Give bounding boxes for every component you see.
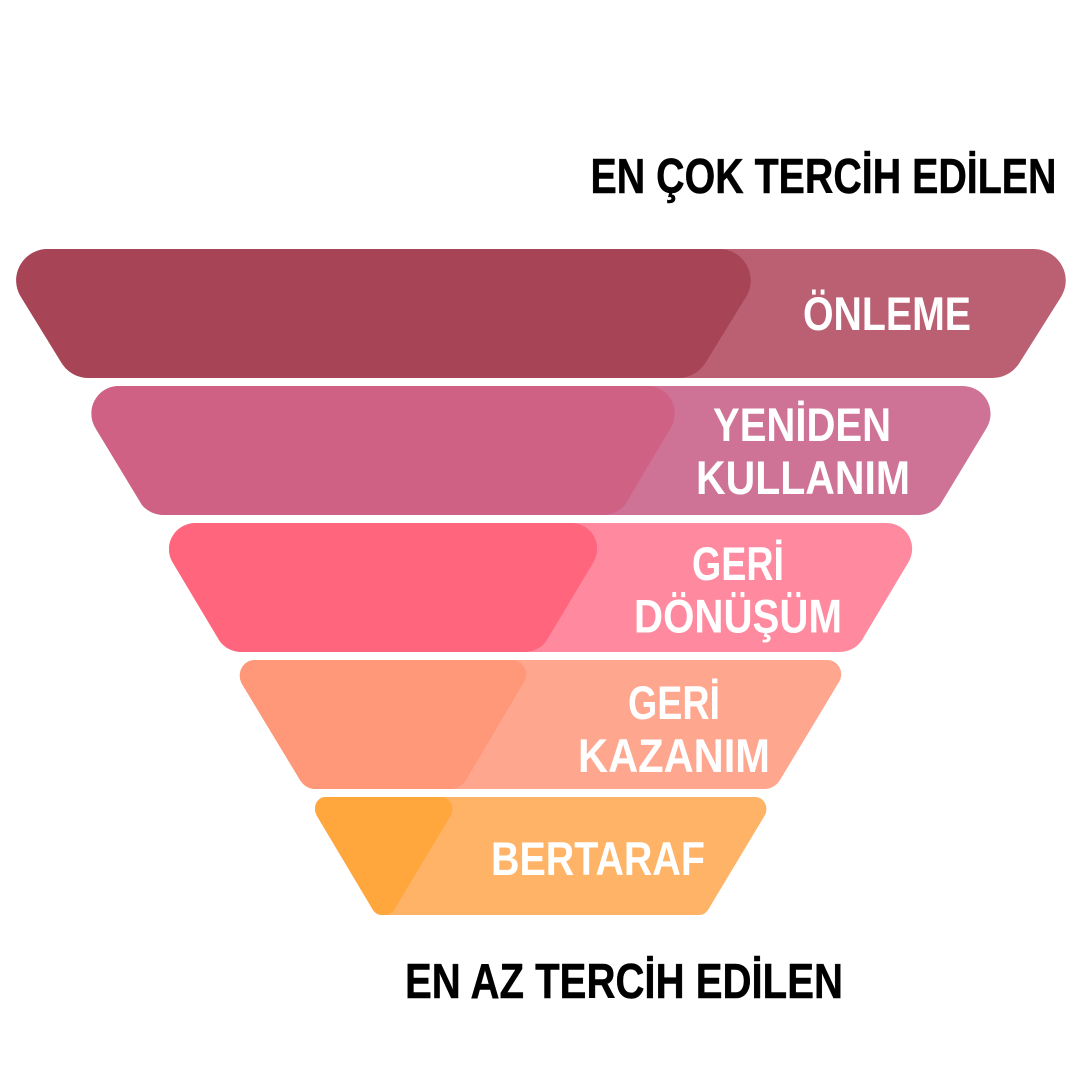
label line: Geri: GERİ (692, 537, 784, 590)
label: Önleme: ÖNLEME (803, 287, 971, 340)
label line: Kazanım: KAZANIM (578, 729, 770, 782)
band: Önleme outer (16, 249, 1066, 378)
label: Yeniden Kullanım (696, 398, 910, 504)
band: Yeniden Kullanım outer (91, 386, 991, 515)
band: Bertaraf outer (315, 797, 766, 915)
label: Geri Kazanım (578, 676, 770, 782)
band: Önleme inner (16, 249, 751, 378)
band: Geri Dönüşüm inner (169, 523, 597, 652)
band: Geri Kazanım outer (240, 660, 841, 789)
band: Bertaraf inner (315, 797, 452, 915)
label: Geri Dönüşüm (634, 537, 842, 642)
label line: Geri: GERİ (628, 676, 720, 729)
label line: Yeniden: YENİDEN (713, 398, 891, 451)
tier: Yeniden Kullanım (91, 386, 991, 515)
heading: least preferred: EN AZ TERCİH EDİLEN (405, 955, 843, 1009)
tier: Geri Kazanım (240, 660, 841, 789)
label line: Kullanım: KULLANIM (696, 451, 910, 504)
band: Yeniden Kullanım inner (91, 386, 675, 515)
tier: Önleme (16, 249, 1066, 378)
tier: Bertaraf (315, 797, 766, 915)
label line: Dönüşüm: DÖNÜŞÜM (634, 590, 842, 642)
label: Bertaraf: BERTARAF (491, 832, 705, 885)
band: Geri Kazanım inner (240, 660, 526, 789)
band: Geri Dönüşüm outer (169, 523, 912, 652)
tier: Geri Dönüşüm (169, 523, 912, 652)
